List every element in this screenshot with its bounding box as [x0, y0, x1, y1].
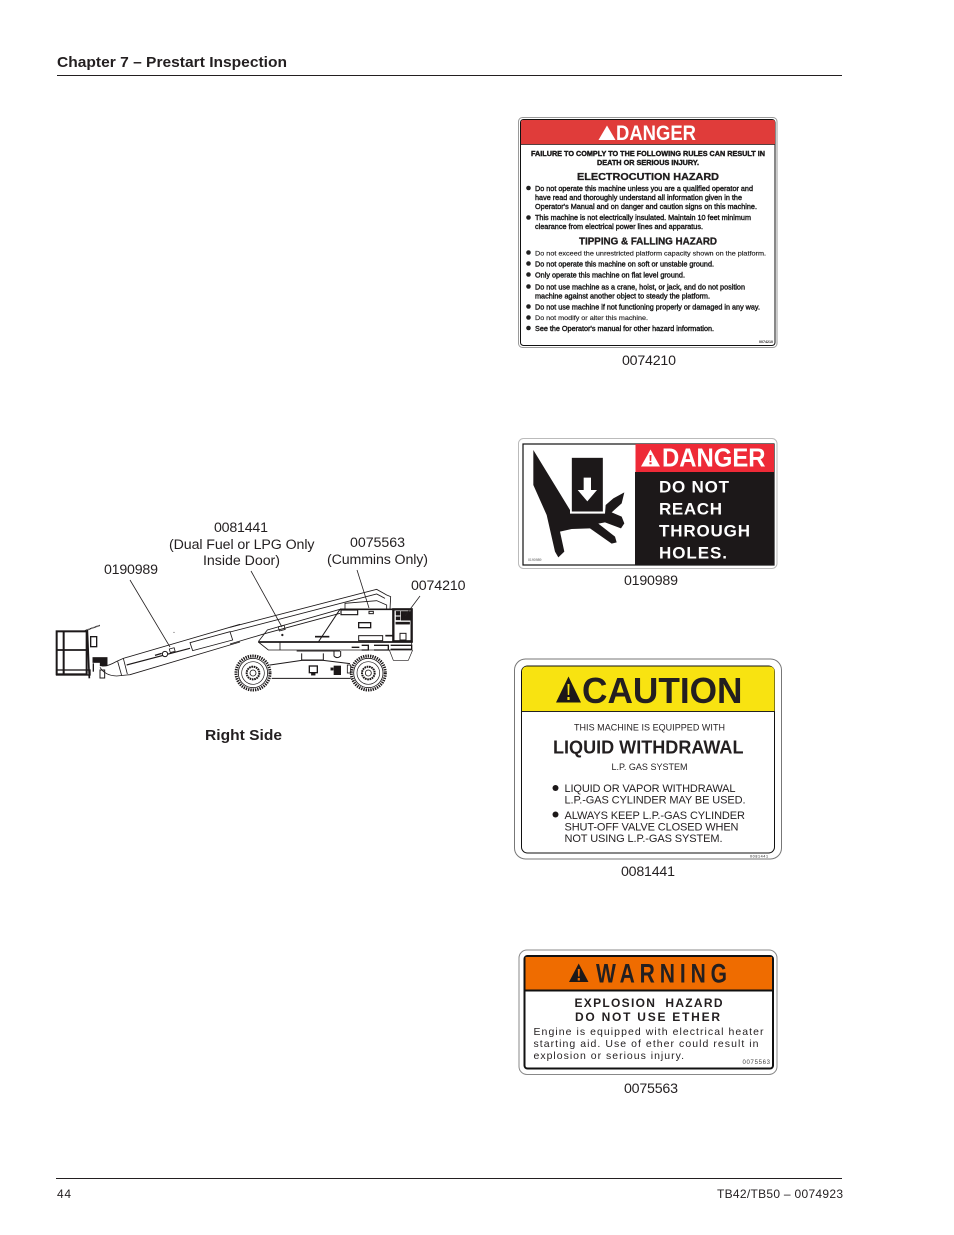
caution header band: CAUTION [582, 670, 742, 711]
electrocution rules: have read and thoroughly understand all information given in the [535, 193, 742, 202]
warning body text [534, 1026, 764, 1062]
message text: HOLES. [659, 544, 727, 562]
caption: 0081441: 0081441 [621, 864, 675, 880]
warning header band: WARNING [596, 959, 727, 989]
part number tag: 0075563 [742, 1060, 771, 1066]
electrocution rules: Do not operate this machine unless you are a qualified operator and [535, 184, 753, 193]
warning heading: EXPLOSION HAZARD [574, 996, 723, 1010]
chassis, turret and upper boom [230, 589, 413, 690]
warning heading: DO NOT USE ETHER [575, 1010, 720, 1024]
sign: do not reach through holes 0190989 [518, 438, 777, 568]
callout: 0190989: 0190989 [104, 562, 158, 578]
tipping rules: Only operate this machine on flat level ground. [535, 270, 685, 280]
black message panel [635, 472, 774, 565]
part number tag: 0190989 [528, 558, 542, 562]
danger header band: DANGER [616, 122, 696, 145]
intro statement [531, 149, 765, 167]
tipping rules: Do not operate this machine on soft or unstable ground. [535, 260, 714, 268]
page header: Chapter 7 – Prestart Inspection [57, 55, 287, 71]
electrocution rules: clearance from electrical power lines and apparatus. [535, 222, 703, 231]
callout: 0081441 dual fuel: Inside Door) [203, 553, 280, 569]
caution bullet list: NOT USING L.P.-GAS SYSTEM. [564, 833, 722, 845]
intro statement: FAILURE TO COMPLY TO THE FOLLOWING RULES CAN RESULT IN [531, 149, 765, 158]
icon: hand entering hole [533, 450, 624, 557]
warning header band [525, 957, 773, 990]
caption: 0074210: 0074210 [622, 353, 676, 369]
callout: 0075563 cummins [327, 535, 428, 568]
page footer: 44 [57, 1187, 71, 1201]
part number tag: 0074210 [759, 340, 773, 344]
tipping rules: Do not use machine if not functioning properly or damaged in any way. [535, 302, 760, 312]
message text [659, 478, 750, 562]
caution bullet list: SHUT-OFF VALVE CLOSED WHEN [564, 822, 739, 834]
part number tag: 0081441 [750, 854, 768, 858]
electrocution rules: Operator's Manual and on danger and caution signs on this machine. [535, 202, 757, 211]
caution intro: THIS MACHINE IS EQUIPPED WITH [574, 722, 725, 732]
message text: DO NOT [659, 478, 730, 496]
caution bullet list: LIQUID OR VAPOR WITHDRAWAL [564, 783, 736, 795]
warning body text: explosion or serious injury. [534, 1050, 684, 1062]
tipping rules: Do not exceed the unrestricted platform capacity shown on the platform. [535, 250, 766, 258]
caution heading: LIQUID WITHDRAWAL [553, 738, 744, 758]
message text: REACH [659, 500, 722, 518]
callout: 0081441 dual fuel [169, 520, 315, 569]
tipping rules [526, 250, 766, 333]
callout: 0074210: 0074210 [411, 578, 466, 594]
warning body text: Engine is equipped with electrical heater [534, 1026, 764, 1038]
caution bullet list: L.P.-GAS CYLINDER MAY BE USED. [564, 794, 746, 806]
tipping rules: Do not use machine as a crane, hoist, or jack, and do not position [535, 282, 745, 292]
sign: caution liquid withdrawal 0081441 [514, 659, 782, 859]
caption: 0190989: 0190989 [624, 573, 678, 589]
callout: 0081441 dual fuel: (Dual Fuel or LPG Only [169, 537, 315, 553]
warning body text: starting aid. Use of ether could result in [534, 1038, 759, 1050]
caution bullet list: ALWAYS KEEP L.P.-GAS CYLINDER [564, 810, 745, 822]
platform and lower boom [57, 624, 240, 678]
sign: danger rules decal 0074210 [518, 118, 777, 348]
callout: 0075563 cummins: (Cummins Only) [327, 552, 428, 568]
callout: 0075563 cummins: 0075563 [350, 535, 405, 551]
danger header band [521, 120, 775, 145]
warning heading [574, 996, 723, 1024]
caution bullet list [552, 783, 746, 845]
page footer [56, 1178, 843, 1201]
danger band: DANGER [662, 442, 766, 472]
tipping rules: See the Operator's manual for other hazard information. [535, 324, 714, 333]
sign: warning explosion hazard 0075563 [519, 950, 777, 1074]
tipping rules: machine against another object to steady the platform. [535, 292, 710, 300]
diagram caption: right side: Right Side [205, 728, 282, 744]
message text: THROUGH [659, 522, 750, 540]
electrocution rules [526, 184, 757, 231]
heading: electrocution hazard: ELECTROCUTION HAZARD [577, 171, 719, 183]
caution header band [522, 666, 774, 712]
wheels [236, 656, 385, 690]
page footer: TB42/TB50 – 0074923 [717, 1187, 843, 1201]
caption: 0075563: 0075563 [624, 1081, 678, 1097]
caution subheading: L.P. GAS SYSTEM [612, 762, 688, 772]
callout: 0081441 dual fuel: 0081441 [214, 520, 268, 536]
intro statement: DEATH OR SERIOUS INJURY. [597, 158, 699, 167]
leader lines [130, 570, 420, 647]
tipping rules: Do not modify or alter this machine. [535, 315, 648, 322]
heading: tipping and falling hazard: TIPPING & FALLING HAZARD [579, 236, 717, 248]
machine diagram: boom lift right side [57, 570, 420, 690]
electrocution rules: This machine is not electrically insulated. Maintain 10 feet minimum [535, 213, 751, 222]
